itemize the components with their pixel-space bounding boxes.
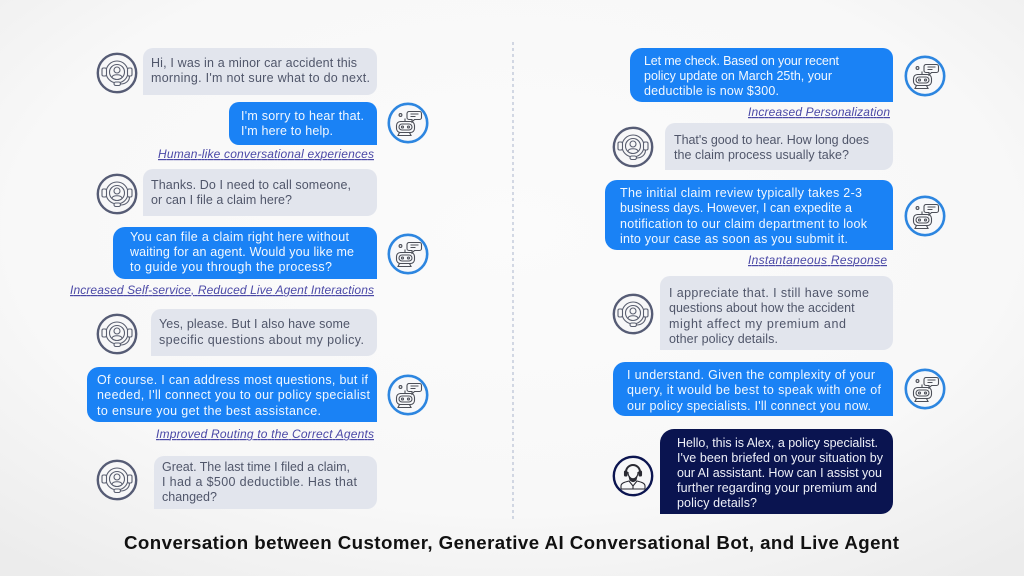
customer message 6: questions about how the accident [669,301,855,315]
bot message 1: I'm here to help. [241,124,333,138]
customer message 1: morning. I'm not sure what to do next. [151,71,370,85]
live agent message: I've been briefed on your situation by [677,451,884,465]
bot message 5 [605,180,944,250]
customer message 6 [614,276,893,350]
customer message 5: the claim process usually take? [674,148,849,162]
benefit label: human-like: Human-like conversational experiences [158,147,374,161]
customer message 6: I appreciate that. I still have some [669,286,869,300]
customer message 2 [98,169,377,216]
bot message 4: policy update on March 25th, your [644,69,832,83]
bot message 5: The initial claim review typically takes 2-3 [620,186,862,200]
customer message 4: changed? [162,490,217,504]
customer message 6: might affect my premium and [669,317,846,331]
benefit label: personalization: Increased Personalization [748,105,890,119]
benefit label: self-service: Increased Self-service, Reduced Live Agent Interactions [70,283,374,297]
bot message 2: waiting for an agent. Would you like me [129,245,354,259]
customer message 1: Hi, I was in a minor car accident this [151,56,357,70]
customer message 2: or can I file a claim here? [151,193,292,207]
bot message 4 [630,48,944,102]
bot message 5: notification to our claim department to look [620,217,868,231]
bot message 2: to guide you through the process? [130,260,332,274]
live agent message: Hello, this is Alex, a policy specialist. [677,436,878,450]
customer message 5 [614,123,893,170]
customer message 6: other policy details. [669,332,778,346]
live agent message: further regarding your premium and [677,481,877,495]
benefit label: instantaneous: Instantaneous Response [748,253,887,267]
bot message 5: business days. However, I can expedite a [620,201,852,215]
bot message 6: query, it would be best to speak with one of [627,383,882,397]
bot message 6: our policy specialists. I'll connect you now. [627,399,871,413]
live agent message [614,429,893,514]
panel: right conversation [605,48,944,514]
bot message 3: needed, I'll connect you to our policy specialist [97,388,371,402]
bot message 4: Let me check. Based on your recent [644,54,840,68]
live agent message: policy details? [677,496,757,510]
title: Conversation between Customer, Generative AI Conversational Bot, and Live Agent [124,532,899,553]
bot message 1 [229,102,427,145]
customer message 3 [98,309,377,356]
customer message 4: I had a $500 deductible. Has that [162,475,358,489]
customer message 4 [98,456,377,509]
bot message 3 [87,367,427,422]
bot message 5: into your case as soon as you submit it. [620,232,848,246]
bot message 1: I'm sorry to hear that. [241,109,364,123]
bot message 6 [613,362,944,416]
customer message 3: Yes, please. But I also have some [159,317,350,331]
panel: left conversation [70,48,427,509]
bot message 3: to ensure you get the best assistance. [97,404,321,418]
bot message 6: I understand. Given the complexity of your [627,368,875,382]
bot message 2 [113,227,427,279]
benefit label: routing: Improved Routing to the Correct Agents [156,427,374,441]
bot message 4: deductible is now $300. [644,84,779,98]
customer message 1 [98,48,377,95]
customer message 5: That's good to hear. How long does [674,133,869,147]
customer message 2: Thanks. Do I need to call someone, [151,178,351,192]
live agent message: our AI assistant. How can I assist you [677,466,882,480]
bot message 2: You can file a claim right here without [130,230,350,244]
customer message 3: specific questions about my policy. [159,333,364,347]
customer message 4: Great. The last time I filed a claim, [162,460,350,474]
bot message 3: Of course. I can address most questions, but if [97,373,369,387]
